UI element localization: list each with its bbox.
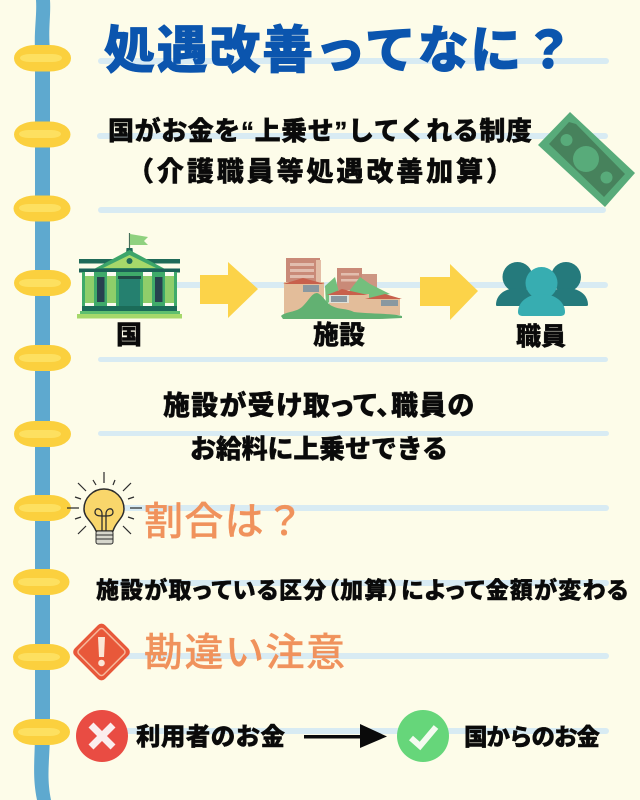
ratio text: 施設が取っている区分（加算）によって金額が変わる (96, 577, 628, 603)
title: 処遇改善ってなに？ (104, 22, 574, 79)
explanation text: 施設が受け取って、職員の (163, 390, 474, 421)
flow diagram (77, 233, 588, 351)
labels: 国 (116, 320, 142, 350)
icon: banknote (538, 112, 635, 207)
heading: ratio: 割合は？ (144, 501, 304, 544)
definition text: 国がお金を“上乗せ”してくれる制度 (108, 116, 532, 146)
icon: light bulb (67, 472, 142, 544)
icon: green check (397, 710, 449, 762)
icon: facility buildings (281, 258, 402, 319)
binding: rope and rings (13, 0, 71, 800)
definition text (108, 116, 532, 187)
arrow (200, 262, 258, 318)
icon: government building (77, 233, 182, 318)
icon: red cross (76, 710, 128, 762)
arrow (420, 264, 478, 320)
heading: misconception: 勘違い注意 (144, 632, 345, 675)
explanation text (163, 390, 474, 464)
correct source label: 国からのお金 (464, 724, 600, 750)
icon: warning diamond (71, 622, 132, 682)
wrong source label: 利用者のお金 (136, 723, 286, 751)
arrow (304, 724, 387, 748)
explanation text: お給料に上乗せできる (190, 434, 448, 464)
flow diagram: 職員 (516, 323, 566, 351)
definition text: （介護職員等処遇改善加算） (127, 156, 513, 187)
ruled lines (97, 58, 609, 734)
flow diagram: 施設 (313, 320, 365, 350)
icon: staff group (496, 262, 588, 316)
